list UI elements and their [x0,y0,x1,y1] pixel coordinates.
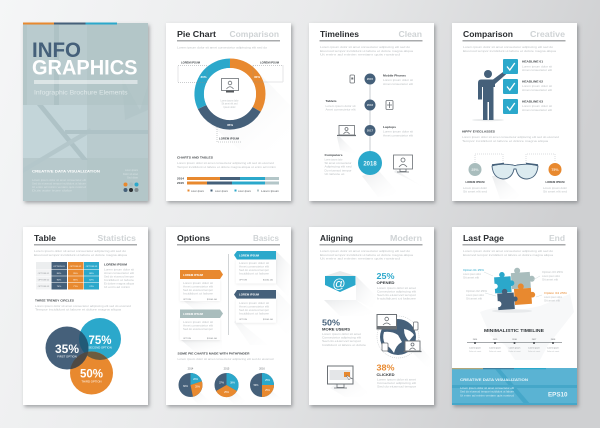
stat: 38% clicked: 38% [376,363,395,373]
option card: grey: Sed do eiusmod tempor [183,328,213,331]
data table: 88% [89,273,94,275]
data table: 74% [89,286,94,288]
section: charts and tables [177,156,276,169]
minimalistic timeline: Dolor sit amet [547,350,560,353]
cover footer text: Lorem ipsum [125,169,138,172]
minimalistic timeline: Dolor sit amet [528,350,541,353]
heading: aligning [320,233,422,246]
intro text: Ut enim ad minim veniam quis nostrud [320,258,401,260]
panel: last page [452,227,577,405]
pie chart: 2014: 20% [193,378,199,381]
world map backdrop [480,294,574,360]
callouts: LOREM IPSUM [260,60,280,64]
stat: 38% clicked: Lorem ipsum dolor sit amet [377,378,416,382]
option card: grey: Amet consectetur elit [183,324,213,328]
panel: comparison page [452,23,577,201]
data table: 80% [57,273,61,275]
heading: pie chart: Comparison [230,29,279,39]
intro text: Lorem ipsum dolor sit amet consectetur adipiscing elit sed do [463,46,554,49]
timeline labels: Tablets [326,99,337,103]
pie chart: 2015: 25% [224,391,230,394]
heading: last page: Last Page [463,233,504,243]
minimalistic timeline: 2018 [551,339,556,341]
stat: left percent: Sit amet elit sed [463,190,488,194]
option card: orange: OPTION [183,299,191,301]
pie chart: 2014: 2014 [188,366,194,370]
stacked bar chart: 2014 [177,176,184,180]
option card: orange: Incididunt ut labore [183,292,214,296]
headlines: Lorem ipsum dolor sit [522,85,552,88]
table side text: Lorem ipsum dolor sit [104,268,134,272]
data table: OPTION 01 [53,266,65,268]
panel: options page [166,227,291,405]
chart legend [188,190,279,193]
timeline nodes: 2015 [367,77,374,81]
cover rule [34,80,138,84]
puzzle labels: Sit amet elit [542,278,558,282]
panel: aligning page [309,227,434,405]
heading: last page: End [549,233,565,243]
timeline axis [228,254,230,335]
timeline axis [370,80,371,155]
icon: tablet [386,100,393,110]
section: three trendy circles: Tempor incididunt ut labore et dolore magna aliqua [35,308,122,312]
cover footer text: Sed diam [127,178,138,180]
icon: eyeglasses [492,164,538,199]
heading: comparison: Creative [530,29,565,39]
donut percent labels: 35% [227,123,233,127]
puzzle labels: Lorem ipsum dolor [463,273,481,276]
puzzle labels: Lorem ipsum dolor [544,296,562,299]
stat: 50% more users: 50% [322,318,340,328]
stat: left percent: LOREM IPSUM [466,180,485,184]
pie chart: 2015 [214,366,248,404]
headlines: Amet consectetur elit [522,109,552,112]
pie chart: 2014 [178,366,212,404]
callouts: LOREM IPSUM [219,136,240,140]
minimalistic timeline: 2017 [532,339,537,341]
timeline labels [324,74,413,176]
data table: OPTION 02 [70,266,82,268]
stat: 25% opened: Consectetur adipiscing elit [377,290,416,294]
puzzle labels: Option 03 25% [542,271,564,274]
minimalistic timeline [467,328,562,353]
panel: timelines page [309,23,434,201]
headlines: Lorem ipsum dolor sit [522,66,552,68]
chart legend: Lorem Ipsum [215,190,228,193]
panel: pie chart page [166,23,291,201]
pie chart: 2016: 25% [265,379,271,382]
stat: right percent: Lorem ipsum dolor [543,187,567,190]
stat: left percent: 25% [471,168,479,172]
icon: desktop monitor [394,155,412,172]
stat: 25% opened: 25% [376,271,395,281]
minimalistic timeline: Lorem ipsum [528,348,540,350]
stat: left percent: Lorem ipsum dolor [463,187,487,190]
minimalistic timeline: 2014 [473,339,478,341]
option card: grey: OPTION [183,338,191,340]
icon: email envelope [324,271,378,316]
table side text: Amet consectetur elit [104,272,134,275]
option card: navy: $100.00 [263,319,274,321]
minimalistic timeline: Lorem ipsum [509,348,521,350]
stat: 50% more users: Sed do eiusmod tempor [322,340,361,343]
headlines: Amet consectetur elit [522,89,552,92]
option card: grey [180,310,223,340]
timeline labels: Do eiusmod tempor [324,170,352,172]
stat: 50% more users: MORE USERS [322,328,351,332]
icon: monitor with cursor [328,366,372,397]
stat: 50% more users: Consectetur adipiscing elit [322,336,361,340]
venn labels: SECOND OPTION [88,346,112,350]
cover footer text: Sed do eiusmod tempor incididunt ut labore [32,182,87,186]
timeline labels: Lorem ipsum dolor [324,158,343,162]
option card: blue: Amet consectetur elit [239,266,269,268]
minimalistic timeline: Lorem ipsum [547,348,559,350]
minimalistic timeline: Dolor sit amet [508,350,521,353]
cover title [32,39,138,80]
dotted connectors [475,154,555,163]
heading: timelines: Clean [398,29,422,39]
donut percent labels: 30% [254,75,260,79]
section: three trendy circles [35,298,132,312]
callouts [178,60,283,142]
table side text: Incididunt ut labore [104,279,135,282]
pie chart: 2016 [250,366,284,400]
long shadows [337,137,428,197]
intro text [463,250,554,257]
venn labels: 75% [88,333,112,347]
donut centre text [220,100,239,109]
heading: table: Table [34,233,56,243]
stacked bar chart [177,176,279,185]
heading: timelines: Timelines [320,29,359,39]
option card: blue: Lorem ipsum dolor sit [239,262,269,265]
stat: 50% more users: Incididunt ut labore et dolore [322,344,367,347]
option card: orange: Sed do eiusmod tempor [183,289,213,292]
section: charts and tables: Tempor incididunt ut labore et dolore magna aliqua ut enim ad minim [177,166,276,169]
puzzle labels [463,269,568,302]
stat: right percent: Sit amet elit sed [543,190,568,194]
section: hippy eyeglasses: Tempor incididunt ut labore et dolore magna aliqua [462,140,549,143]
check boxes [503,59,518,114]
section: hippy eyeglasses: Lorem ipsum dolor sit amet consectetur adipiscing elit sed do eiusmod [462,136,560,139]
heading: pie chart [177,29,280,50]
option card: orange: Lorem ipsum dolor sit [183,282,213,285]
option card: blue: Sed do eiusmod tempor [239,269,269,272]
venn diagram [46,318,121,394]
section: pie charts heading: Lorem ipsum dolor sit amet consectetur adipiscing elit sed do eiusmod [178,358,274,361]
cover footer text: Duis aute irure dolor [32,190,72,192]
footer band: CREATIVE DATA VISUALIZATION [460,377,528,382]
heading: options: Options [177,233,210,243]
data table: OPTION 03 [38,286,50,288]
section: pie charts heading [178,352,274,361]
cover title: GRAPHICS [32,56,138,80]
intro text: Lorem ipsum dolor sit amet consectetur adipiscing elit sed do [34,250,127,253]
section: pie charts heading: SOME PIE CHARTS MADE WITH PATHFINDER [178,352,251,356]
puzzle labels: Sit amet elit [463,276,479,280]
cover footer text [32,169,138,192]
section: three trendy circles: Lorem ipsum dolor sit amet consectetur adipiscing elit sed do eiusmod [35,305,132,308]
intro text: Eiusmod tempor incididunt ut labore et dolore magna aliqua [463,50,557,53]
intro text: Eiusmod tempor incididunt ut labore et dolore magna aliqua [320,254,414,257]
option card: navy: OPTION [239,319,247,321]
minimalistic timeline: Lorem ipsum [489,348,501,350]
data table [36,262,99,290]
timeline labels: Amet consectetur elit [383,134,413,138]
pie chart: 2015: 37% [219,382,225,384]
minimalistic timeline: Dolor sit amet [469,350,482,353]
table side text [104,262,135,289]
option card: orange: Amet consectetur elit [183,286,213,288]
headlines: HEADLINE 01 [522,60,543,64]
headlines: HEADLINE 02 [522,80,543,84]
timeline labels: Amet consectetur elit [326,108,356,112]
table side text: Sed do eiusmod tempor [104,276,134,278]
stat: 25% opened [376,271,417,300]
section: charts and tables: Lorem ipsum dolor sit amet consectetur adipiscing elit sed do eiusmod [177,162,275,165]
timeline labels: Mobile Phones [383,74,406,78]
cover accent bar [23,22,117,24]
heading: pie chart: Lorem ipsum dolor sit amet consectetur adipiscing elit sed do [177,46,268,50]
puzzle labels: Lorem ipsum dolor [466,294,484,297]
data table: 95% [73,273,78,275]
section: hippy eyeglasses [462,130,560,143]
donut centre text: Sit amet elit sed [222,102,238,106]
heading: comparison: Comparison [463,29,513,39]
icon: laptop [337,126,356,136]
timeline labels: Lorem ipsum dolor sit [326,105,356,108]
icon: globe with devices [377,314,432,372]
timeline labels: Lorem ipsum dolor sit [383,79,413,82]
heading: aligning: Modern [390,233,422,243]
stat: 38% clicked: Sed do eiusmod tempor [377,386,416,388]
cover footer text: Lorem ipsum dolor sit amet consectetur elit [32,179,86,182]
timeline labels: Amet consectetur elit [383,83,413,86]
option card: blue [234,251,276,284]
minimalistic timeline: 2015 [493,339,498,341]
option card: orange [180,270,223,301]
headlines: HEADLINE 03 [522,100,543,104]
donut long shadow [205,70,291,150]
heading: aligning: Aligning [320,233,353,243]
headlines: Amet consectetur elit [522,69,552,72]
pie chart: 2015: 38% [230,382,236,384]
stat: 50% more users [322,318,367,347]
donut centre text: Lorem ipsum dolor [220,100,239,102]
table side text: LOREM IPSUM [104,262,128,266]
stat: 38% clicked [376,363,416,388]
stat: right percent [543,163,568,194]
icon: monitor [222,78,238,92]
data table: 71% [73,286,78,288]
callouts: LOREM IPSUM [181,60,201,64]
timeline nodes: 2018 [363,162,377,168]
donut percent labels [200,75,260,127]
data table: OPTION 01 [38,273,50,275]
chart legend: Lorem Ipsum [238,190,251,193]
venn labels: 50% [80,366,103,380]
option card: blue: LOREM IPSUM [239,254,259,258]
intro text [34,250,128,257]
pie chart: 2016: 25% [265,389,271,392]
venn labels: 35% [55,342,79,356]
timeline labels: Laptops [383,125,396,129]
timeline labels: Ut labore et [324,173,345,176]
option card: navy: Sed do eiusmod tempor [239,309,269,312]
table side text: Ut enim ad minim [104,286,130,289]
timeline nodes: 2016 [367,103,374,107]
heading: table [34,233,137,246]
footer band: EPS10 [548,392,568,398]
intro text: Eiusmod tempor incididunt ut labore et dolore magna aliqua [34,254,128,257]
intro text [463,46,557,53]
option card: navy: Lorem ipsum dolor sit [239,302,269,305]
cover footer text: Ut enim ad minim veniam quis nostrud [32,186,87,189]
option card: blue: OPTION [239,280,247,282]
donut percent labels: 30% [200,75,207,79]
cover subtitle: Infographic Brochure Elements [34,90,128,96]
venn labels: FIRST OPTION [57,354,77,358]
minimalistic timeline: Dolor sit amet [489,350,502,353]
option card: orange: $100.00 [207,299,218,301]
intro text: Eiusmod tempor incididunt ut labore et dolore magna aliqua [463,254,554,257]
stat: 38% clicked: CLICKED [376,373,395,377]
stat: right percent: 75% [551,168,559,172]
option card: blue: $100.00 [263,280,274,282]
timeline nodes: 2017 [367,128,374,132]
table side text: Et dolore magna aliqua [104,282,135,286]
pie chart: 2015: 2015 [224,366,230,370]
option card: blue: Incididunt ut labore [239,272,270,276]
data table: 90% [57,280,61,282]
stat: 25% opened: OPENED [376,281,395,285]
stat: 38% clicked: Consectetur adipiscing elit [377,382,416,385]
minimalistic timeline: Lorem ipsum [469,348,481,350]
intro text: Ut enim ad minim veniam quis nostrud [320,54,401,56]
pie chart: 2016: 50% [254,384,259,387]
option card: grey: $100.00 [207,338,218,340]
cover title: INFO [32,39,81,62]
footer band [452,368,577,405]
intro text: Eiusmod tempor incididunt ut labore et dolore magna aliqua [320,50,414,53]
venn labels: THIRD OPTION [81,380,102,384]
pie chart: 2014: 60% [183,385,189,388]
footer band: Lorem ipsum dolor sit amet consectetur elit [460,387,514,390]
donut centre text: Ipsum dolor [224,106,236,109]
option card: grey: Lorem ipsum dolor sit [183,321,213,324]
chart legend: Lorem Ipsum [191,190,204,193]
footer band: Sed do eiusmod tempor incididunt ut labore [460,390,515,394]
option card: orange: LOREM IPSUM [183,273,203,277]
option card: navy: Incididunt ut labore [239,312,270,316]
panel: cover page [23,22,148,201]
heading: pie chart: Pie Chart [177,29,216,39]
puzzle labels: Option 02 25% [466,290,488,293]
headlines [522,60,552,112]
puzzle labels: Lorem ipsum dolor [542,275,560,278]
intro text: Lorem ipsum dolor sit amet consectetur adipiscing elit sed do [320,46,411,49]
donut chart [188,52,272,136]
footer band: Ut enim ad minim veniam quis nostrud [460,394,515,398]
puzzle chart [491,267,537,313]
panel: table page [23,227,148,405]
chart legend: Lorem Ipsum [261,190,279,193]
cover footer text: Dolor sit amet [123,173,138,176]
minimalistic timeline: 2016 [512,339,518,341]
intro text: Lorem ipsum dolor sit amet consectetur adipiscing elit sed do [320,250,411,253]
puzzle labels: Option 04 25% [544,292,568,295]
option card: grey: LOREM IPSUM [183,312,203,316]
pie chart: 2014: 20% [195,386,201,388]
option card: navy [234,290,276,323]
puzzle labels: Sit amet elit [544,300,560,302]
data table: 74% [57,286,61,288]
stat: 25% opened: Incididunt ut labore [377,298,417,300]
icon: person pointing [472,70,508,121]
timeline labels: Lorem ipsum dolor sit [383,130,413,134]
stat: 25% opened: Lorem ipsum dolor sit amet [377,287,416,290]
stacked bar chart: 2015 [177,181,184,185]
stat: 50% more users: Lorem ipsum dolor sit amet [322,333,361,336]
heading: comparison [462,29,566,42]
timeline nodes [358,74,382,175]
data table: 82% [89,280,94,282]
section: hippy eyeglasses: HIPPY EYEGLASSES [462,130,495,134]
timeline labels: Computers [324,153,343,157]
heading: options [177,233,280,246]
heading: table: Statistics [98,233,136,243]
cover colour swatches [124,182,138,192]
timeline labels: Sit amet consectetur [324,162,352,165]
heading: last page [462,233,566,246]
icon: email envelope: @ [332,276,346,291]
headlines: Lorem ipsum dolor sit [522,105,552,108]
puzzle labels: Option 01 25% [463,269,485,272]
timeline labels: Adipiscing elit sed [324,166,352,168]
cover footer heading: CREATIVE DATA VISUALIZATION [32,168,100,174]
pie chart: 2016: 2016 [259,366,265,370]
intro text [320,46,414,56]
intro text: Lorem ipsum dolor sit amet consectetur adipiscing elit sed do [463,250,554,253]
option card: navy: LOREM IPSUM [239,292,259,296]
icon: phone [350,75,354,83]
data table: OPTION 02 [38,280,50,282]
long shadows [180,251,291,352]
data table: 80% [73,280,78,282]
stat: right percent: LOREM IPSUM [546,180,565,184]
venn labels [55,333,112,384]
puzzle labels: Sit amet elit [466,298,482,300]
stat: left percent [463,163,488,194]
heading: timelines [320,29,422,42]
data table: OPTION 03 [86,266,98,268]
option card: navy: Amet consectetur elit [239,306,269,308]
section: three trendy circles: THREE TRENDY CIRCLES [35,298,74,302]
heading: options: Basics [253,233,279,243]
section: charts and tables: CHARTS AND TABLES [177,156,213,160]
stat: 25% opened: Sed do eiusmod tempor [377,294,416,297]
intro text [320,250,414,260]
minimalistic timeline: MINIMALISTIC TIMELINE [484,328,544,333]
